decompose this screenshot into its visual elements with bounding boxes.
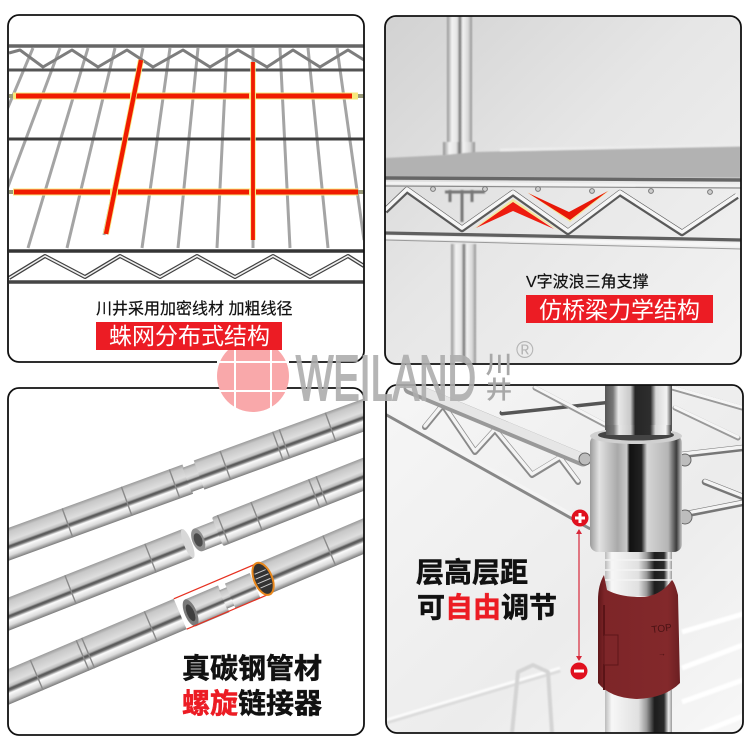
tube two [0,455,381,632]
shelf wires [388,386,743,527]
tube three [8,518,364,705]
caption: dense wire: 川井采用加密线材 加粗线径 [96,300,292,318]
brand characters: 川 [486,352,512,379]
brand characters: 井 [486,377,512,404]
heading: free adjustment: 可自由调节 [417,592,557,623]
red plastic sleeve [598,575,680,699]
red highlighted wires [13,60,358,240]
exposed connector [174,564,270,630]
panel: adjustable shelf height [386,385,743,733]
brand characters [486,352,512,404]
registered mark: ® [516,337,534,364]
blurred shelf [385,145,741,222]
heading: carbon steel tube: 真碳钢管材 [182,653,322,684]
panel: carbon steel tubes [0,388,392,735]
heading: spiral connector: 螺旋链接器 [182,688,322,719]
red label: spider-web structure: 蛛网分布式结构 [109,323,270,349]
watermark logo [217,337,534,414]
brand name: WEILAND [296,342,476,414]
heading: shelf spacing: 层高层距 [416,557,528,588]
caption: V-wave support: V字波浪三角支撑 [526,273,649,291]
threaded opening [251,562,275,596]
blurred lower basket [386,614,743,733]
height arrow [578,530,580,660]
plus marker [572,510,588,526]
chrome pole [605,386,672,432]
shelf wires [6,46,364,282]
panel: spider-web wire structure [6,15,364,362]
red plastic sleeve: TOP [651,622,673,636]
tube one [8,399,364,561]
chrome collar [590,425,682,596]
collar knobs [579,453,692,524]
upright pole [443,16,476,364]
red highlighted chevrons [472,190,610,231]
panel: V-shaped triangle support [385,16,741,364]
rail and zigzag [385,178,741,249]
logo circle [217,340,289,412]
red label: bridge mechanics: 仿桥梁力学结构 [539,297,700,323]
red plastic sleeve: → [658,649,666,658]
minus marker [570,662,588,680]
